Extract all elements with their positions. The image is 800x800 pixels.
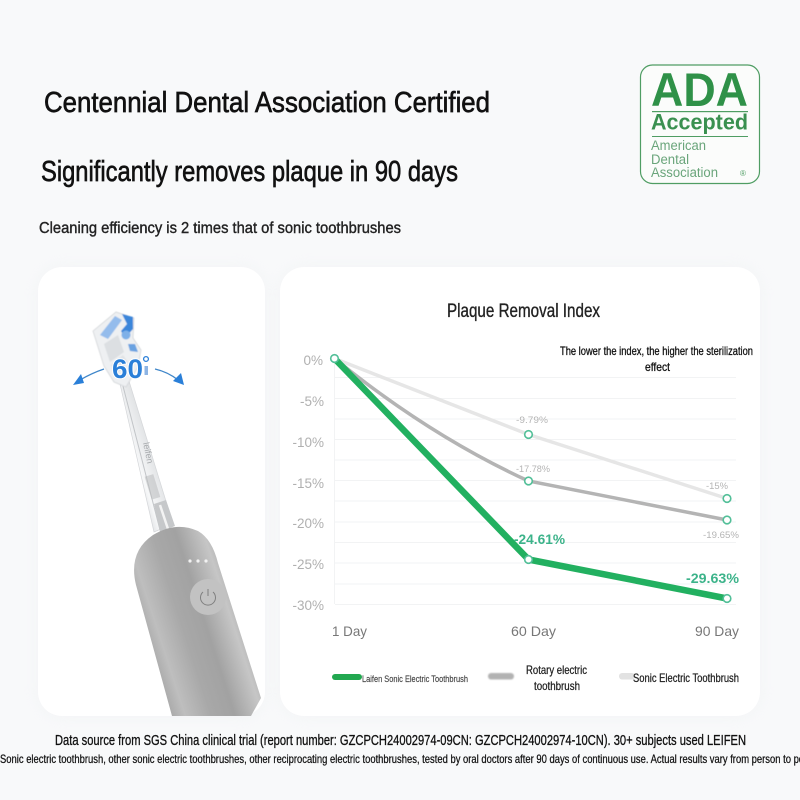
legend item: Sonic: Sonic Electric Toothbrush	[633, 671, 739, 685]
shaft brand text: leifen	[141, 441, 155, 464]
badge heading: ADA: ADA	[651, 63, 748, 116]
legend	[332, 663, 739, 693]
indicator lights	[188, 559, 208, 563]
legend item: Rotary	[488, 663, 587, 693]
subtitle: Significantly removes plaque in 90 days	[41, 156, 458, 188]
badge text: Accepted: Accepted	[651, 110, 748, 134]
legend item: Rotary: Rotary electric	[526, 663, 587, 677]
chart note	[560, 344, 753, 374]
series: rotary electric toothbrush	[334, 358, 740, 541]
arrow: rotate right	[155, 369, 184, 385]
series: rotary electric toothbrush: -17.78%	[516, 464, 551, 475]
series: sonic electric toothbrush	[334, 358, 731, 502]
badge text: American Dental Association: Association	[651, 165, 718, 180]
x axis labels: 60 Day	[511, 623, 556, 639]
icon: toothbrush handle	[134, 527, 261, 716]
badge text: American Dental Association: American	[651, 138, 706, 153]
y axis labels: -15%	[292, 476, 324, 491]
x axis labels	[332, 623, 739, 639]
panel: chart	[280, 267, 760, 716]
registered mark: ®	[740, 169, 746, 178]
series: rotary electric toothbrush: -19.65%	[703, 530, 740, 541]
y axis labels: -10%	[292, 435, 324, 450]
y axis labels: -30%	[292, 598, 324, 613]
tagline: Cleaning efficiency is 2 times that of sonic toothbrushes	[39, 220, 401, 237]
series: Laifen sonic electric toothbrush: -24.61%	[514, 531, 566, 547]
y axis labels: -20%	[292, 516, 324, 531]
panel: toothbrush	[38, 267, 265, 716]
chart title: Plaque Removal Index	[447, 301, 600, 322]
x axis labels: 1 Day	[332, 623, 367, 639]
series: sonic electric toothbrush: -9.79%	[516, 415, 549, 426]
power button	[190, 579, 226, 615]
x axis labels: 90 Day	[695, 623, 739, 639]
badge: ADA Accepted	[640, 63, 760, 184]
legend item: Laifen: Laifen Sonic Electric Toothbrush	[362, 674, 468, 685]
y axis labels: -5%	[300, 394, 324, 409]
series: Laifen sonic electric toothbrush	[331, 355, 740, 602]
icon: brush head	[93, 312, 141, 387]
arrow: rotate left	[73, 369, 104, 385]
badge text: American Dental Association: Dental	[651, 152, 689, 167]
title: Centennial Dental Association Certified	[44, 87, 490, 119]
series: sonic electric toothbrush: -15%	[706, 481, 729, 492]
legend item: Rotary: toothbrush	[534, 679, 580, 693]
series: Laifen sonic electric toothbrush: -29.63%	[686, 570, 740, 586]
legend item: Laifen	[332, 674, 468, 685]
badge text: American Dental Association	[651, 138, 718, 180]
y axis labels: -25%	[292, 557, 324, 572]
icon: toothbrush shaft	[120, 381, 175, 532]
chart note: effect	[645, 360, 671, 374]
label: 60 degrees: 60	[112, 354, 143, 384]
y axis labels: 0%	[303, 353, 323, 368]
y axis labels	[292, 353, 324, 613]
